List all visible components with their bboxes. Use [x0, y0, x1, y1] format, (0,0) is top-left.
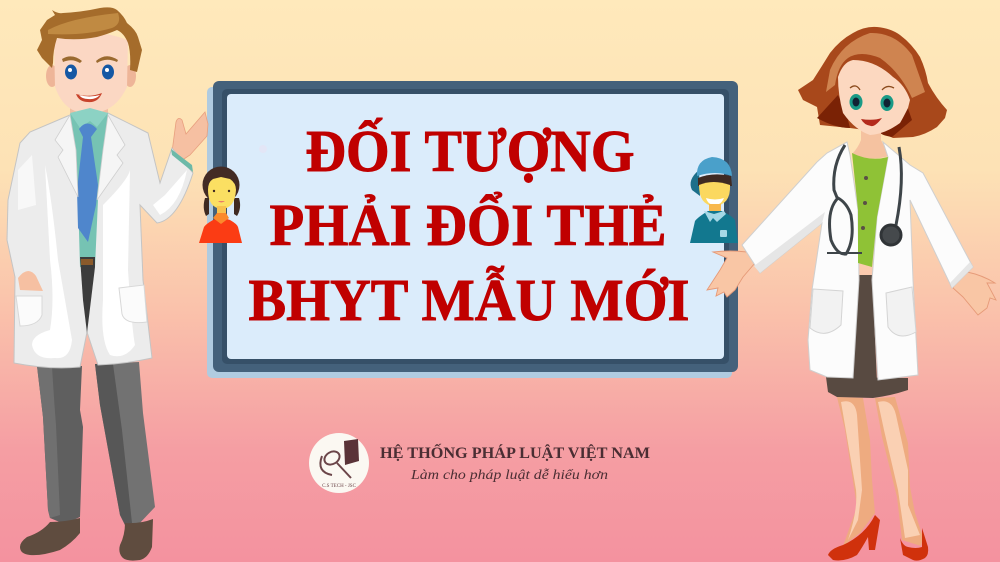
shirt buttons: [861, 176, 868, 230]
coat highlights: [32, 165, 187, 358]
icon: girl avatar: [199, 166, 242, 243]
illustration: female doctor: [707, 27, 996, 561]
ears: [46, 65, 136, 87]
lab coat right: [872, 142, 973, 380]
shirt: [852, 153, 888, 267]
shoes: [20, 518, 153, 561]
illustration: male doctor: [7, 7, 208, 561]
hands: [707, 251, 996, 315]
neck: [852, 125, 889, 159]
hair: [37, 7, 142, 72]
title: [248, 118, 690, 333]
hair top: [826, 33, 925, 98]
cuff: [171, 149, 193, 172]
logo text: Làm cho pháp luật dễ hiểu hơn: [410, 468, 608, 483]
belt buckle: [81, 259, 93, 265]
logo: [309, 433, 369, 493]
title: ĐỐI TƯỢNG: [306, 118, 634, 184]
eyes and mouth: [850, 86, 894, 126]
skirt: [826, 275, 908, 398]
panel: title board: [207, 81, 738, 378]
title: PHẢI ĐỔI THẺ: [270, 192, 666, 258]
pocket hand: [18, 271, 43, 291]
pockets: [810, 287, 916, 336]
logo text: [380, 442, 650, 483]
shoes: [828, 515, 928, 561]
lab coat: [7, 113, 193, 368]
hair shadow: [817, 95, 912, 137]
sleeve shading: [754, 212, 973, 288]
title: BHYT MẪU MỚI: [248, 266, 690, 333]
stethoscope: [827, 145, 901, 254]
eyes and mouth: [62, 56, 118, 102]
shirt: [70, 113, 108, 267]
logo: C.S TECH - JSC: [322, 484, 357, 489]
pockets: [16, 285, 147, 326]
face: [54, 33, 128, 114]
trousers: [37, 362, 155, 525]
legs: [837, 397, 923, 546]
raised hand: [172, 112, 208, 161]
neck: [70, 100, 108, 122]
icon: worker avatar: [690, 157, 738, 243]
collar: [70, 108, 108, 128]
face: [838, 60, 910, 135]
tie: [77, 124, 98, 242]
logo text: HỆ THỐNG PHÁP LUẬT VIỆT NAM: [380, 442, 650, 462]
belt and centre trousers: [80, 257, 95, 333]
lapels: [55, 115, 125, 200]
lab coat left: [742, 142, 859, 378]
hair back: [798, 27, 947, 138]
